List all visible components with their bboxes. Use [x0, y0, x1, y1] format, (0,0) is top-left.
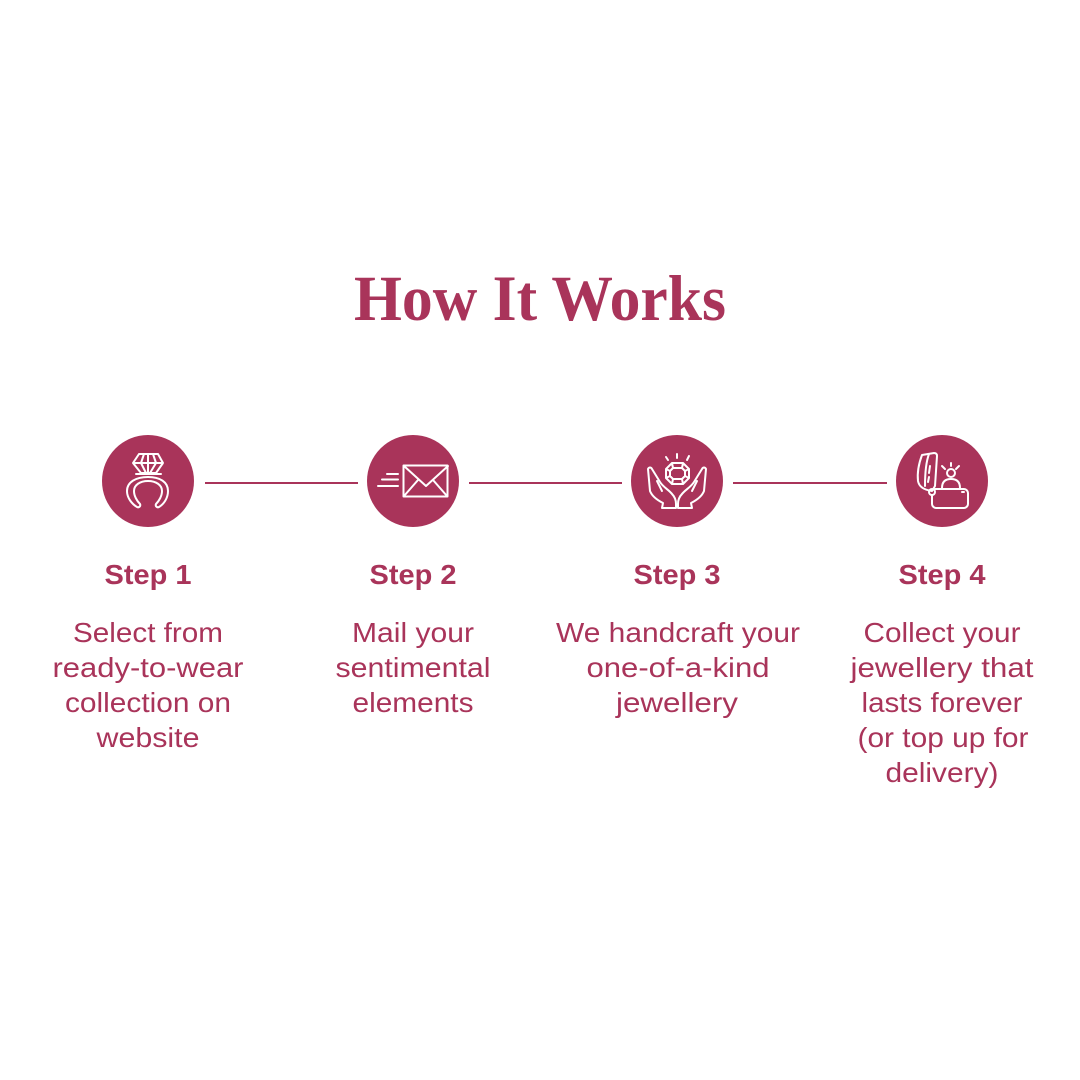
step 3 description: jewellery	[615, 687, 738, 718]
icon: diamond ring	[102, 435, 194, 527]
step 2 description: Mail your	[352, 617, 474, 648]
connector line 3 to 4	[733, 482, 887, 484]
title: How It Works	[354, 263, 726, 335]
step 1 description: collection on	[65, 687, 231, 718]
step 2 description: elements	[352, 687, 474, 718]
step 1 panel	[52, 435, 244, 753]
step 2 description	[336, 617, 490, 718]
step 2 description: sentimental	[336, 652, 490, 683]
step 1 description	[52, 617, 244, 753]
step 4 panel	[849, 435, 1034, 788]
step 4 description: lasts forever	[862, 687, 1022, 718]
step 4 description: Collect your	[864, 617, 1020, 648]
step 4 description: jewellery that	[849, 652, 1034, 683]
step 4 description: delivery)	[886, 757, 998, 788]
step 4 heading: Step 4	[898, 559, 986, 590]
step 1 heading: Step 1	[104, 559, 192, 590]
step 1 description: Select from	[73, 617, 223, 648]
step 2 heading: Step 2	[370, 559, 456, 590]
step 4 description: (or top up for	[858, 722, 1028, 753]
step 3 description: one-of-a-kind	[586, 652, 770, 683]
step 3 panel	[556, 435, 800, 718]
step 4 description	[849, 617, 1034, 788]
icon: envelope	[367, 435, 459, 527]
step 3 description: We handcraft your	[556, 617, 800, 648]
step 3 heading: Step 3	[634, 559, 720, 590]
step 1 description: ready-to-wear	[52, 652, 244, 683]
step 2 panel	[336, 435, 490, 718]
icon: open ring box	[896, 435, 988, 527]
connector line 1 to 2	[205, 482, 358, 484]
step 3 description	[556, 617, 800, 718]
connector line 2 to 3	[469, 482, 622, 484]
step 1 description: website	[95, 722, 200, 753]
icon: hands holding gem	[631, 435, 723, 527]
